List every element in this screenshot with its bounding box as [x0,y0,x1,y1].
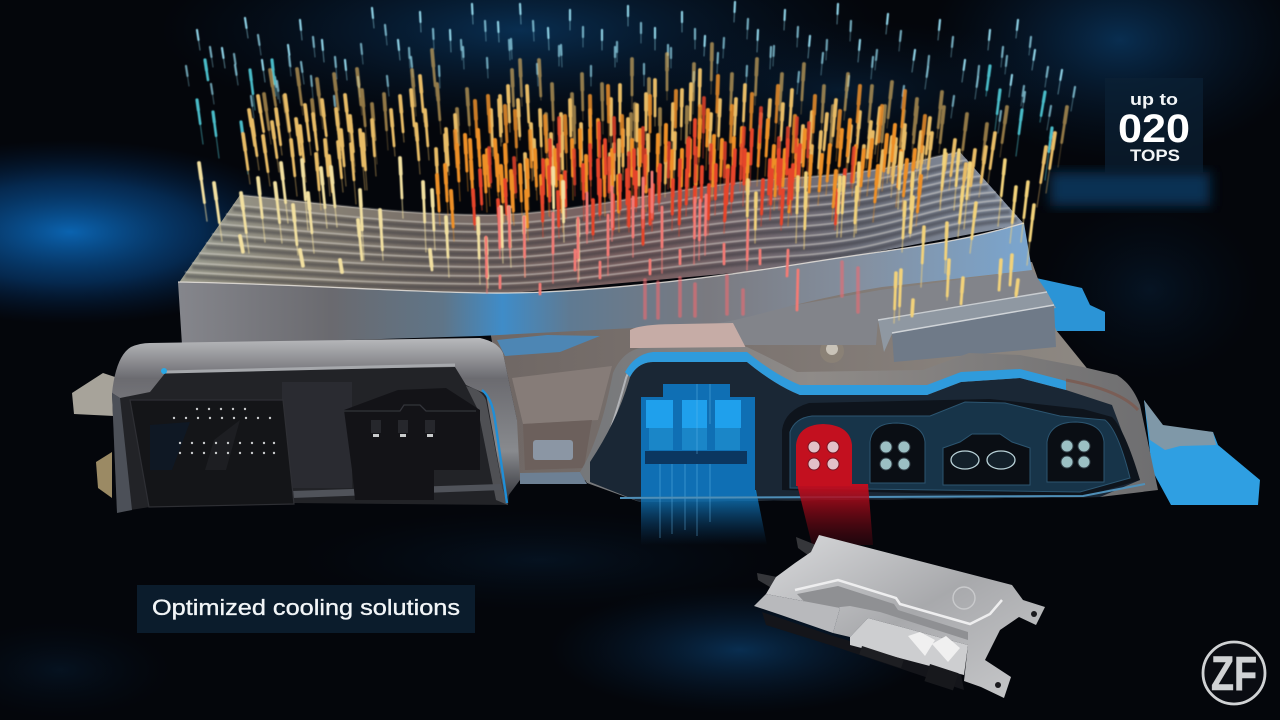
blue cooling connector [641,384,767,545]
stat: up to 020 TOPS: TOPS [1130,146,1180,165]
stat: up to 020 TOPS: up to [1130,90,1178,109]
red socket [796,424,852,486]
front cover left [754,594,840,633]
logo: ZF [1203,642,1265,704]
main plate [766,535,1045,698]
dark front edge [762,612,964,690]
socket three [943,434,1030,485]
top-right flange [1036,278,1105,331]
particles: rising heat streaks [186,2,1075,323]
bolt [820,339,844,363]
hose stubs [757,537,816,590]
front cover right [850,618,968,675]
logo: ZF: ZF [1211,648,1257,701]
outer rim [580,347,1158,502]
housing: left frame with connectors [112,338,520,513]
stat: up to 020 TOPS: 020 [1118,107,1190,151]
product photo: small module [754,535,1045,698]
ports [859,646,904,668]
socket two [870,423,925,483]
socket panel [620,399,1145,545]
housing body behind frame [490,262,1120,484]
caption: Optimized cooling solutions [152,595,460,620]
small logo on plate [953,587,975,609]
flanges [72,373,1260,505]
red beam [797,484,873,545]
heat-sink front plate [178,223,1032,345]
heat-sink fins [178,152,1024,295]
mounting ears [1031,611,1037,617]
left flange [72,373,118,416]
silver top block [630,323,746,348]
connector middle [344,388,480,500]
stat: up to 020 TOPS [1105,78,1203,173]
housing: right frame [580,323,1158,502]
caption [137,585,475,633]
secondary plates right [700,270,1056,362]
right flange [1144,400,1260,505]
blue light strip [625,352,1066,395]
connector left [130,400,294,507]
dark body [590,362,1140,502]
socket four [1047,422,1104,482]
